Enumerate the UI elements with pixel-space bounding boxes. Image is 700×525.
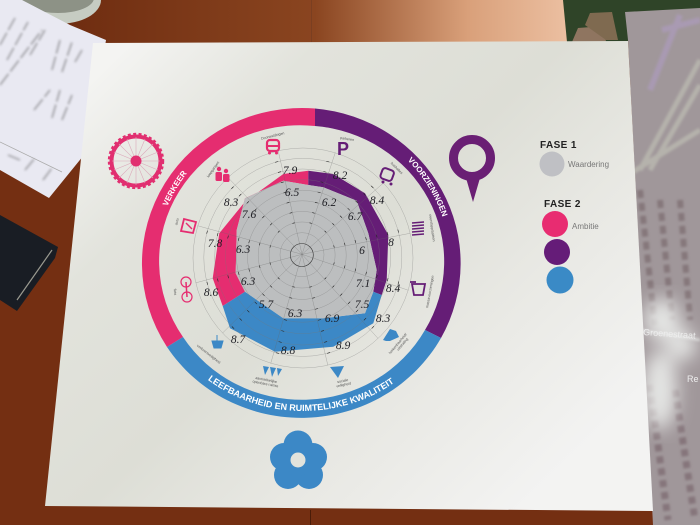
criterion: aantrekkelijke openbare ruimte: openbare ruimte xyxy=(252,379,279,388)
handwritten scores: ambitie: 8.3 xyxy=(376,313,390,325)
poster sheet xyxy=(45,41,653,511)
criterion: fiets: fiets xyxy=(173,288,177,296)
handwritten scores: ambitie: 7.8 xyxy=(208,238,222,250)
outer ring: leefbaarheid en ruimtelijke kwaliteit xyxy=(167,330,441,418)
criterion: overstapplaatsen xyxy=(412,214,436,242)
criterion: verkeersveiligheid xyxy=(196,335,223,365)
ambitie polygon: verkeer xyxy=(213,171,308,306)
legend: fase 2: FASE 2 xyxy=(544,199,581,210)
handwritten scores: waardering: 6.2 xyxy=(322,197,336,209)
criterion: massavoorzieningen xyxy=(410,275,435,308)
aerial map background: Groenestraat xyxy=(643,327,696,341)
outer ring: voorzieningen: VOORZIENINGEN xyxy=(409,156,448,216)
loose document sheet xyxy=(0,0,106,198)
criterion: auto xyxy=(174,218,196,233)
handwritten scores: waardering: 7.5 xyxy=(355,299,369,311)
handwritten scores: waardering: 6.9 xyxy=(325,313,339,325)
handwritten scores: waardering: 6.3 xyxy=(288,308,302,320)
criterion: herkenbaarheid uitstraling: herkenbaarheid/ xyxy=(388,333,408,355)
handwritten scores: ambitie: 8.3 xyxy=(224,197,238,209)
criterion: parkeren xyxy=(337,136,354,159)
ambitie polygon: voorzieningen xyxy=(308,171,388,295)
handwritten scores: waardering: 6.5 xyxy=(285,187,299,199)
handwritten scores: waardering: 7.6 xyxy=(242,209,256,221)
handwritten scores: ambitie: 8.9 xyxy=(336,340,350,352)
criterion: lopen xyxy=(206,161,230,182)
handwritten scores: waardering: 6.3 xyxy=(241,276,255,288)
legend: fase 2: Ambitie xyxy=(572,222,599,231)
criterion: aantrekkelijke openbare ruimte xyxy=(252,366,282,388)
aerial map background: Re xyxy=(687,374,699,384)
legend: fase 2 xyxy=(542,199,599,294)
handwritten scores: ambitie: 8.7 xyxy=(231,334,246,346)
icon: bicycle wheel xyxy=(109,134,163,188)
criterion: auto: auto xyxy=(174,218,180,226)
legend: fase 1 xyxy=(540,140,609,176)
handwritten scores: ambitie: 8.4 xyxy=(386,283,400,295)
criterion: bushaltes xyxy=(380,161,404,186)
aerial map background xyxy=(563,0,700,525)
waardering polygon xyxy=(236,181,377,318)
criterion: massavoorzieningen: massavoorzieningen xyxy=(425,275,435,308)
criterion: overstapplaatsen: overstapplaatsen xyxy=(428,214,436,242)
criterion: sociale veiligheid xyxy=(330,366,351,388)
criterion: doorwaldingen: Doorwaldingen xyxy=(261,131,285,141)
handwritten scores: ambitie: 8.6 xyxy=(204,287,218,299)
outer ring: leefbaarheid en ruimtelijke kwaliteit: LEEFBAARHEID EN RUIMTELIJKE KWALITEIT xyxy=(208,375,393,411)
icon: map pin xyxy=(454,140,490,202)
criterion: bushaltes: bushaltes xyxy=(390,161,404,175)
criterion: sociale veiligheid: sociale xyxy=(337,378,349,384)
handwritten scores: waardering: 5.7 xyxy=(259,299,274,311)
criterion: aantrekkelijke openbare ruimte: aantrekkelijke xyxy=(255,376,277,384)
criterion: lopen: loopgangen xyxy=(206,161,220,178)
outer ring: verkeer xyxy=(142,108,315,347)
handwritten scores: ambitie: 7.9 xyxy=(283,165,297,177)
legend: fase 1: Waardering xyxy=(568,160,609,169)
handwritten scores: waardering: 6.7 xyxy=(348,211,363,223)
criterion: parkeren: P xyxy=(337,139,349,159)
handwritten scores: waardering xyxy=(236,187,370,325)
wallet xyxy=(0,215,58,311)
criterion: fiets xyxy=(173,277,192,302)
criterion: doorwaldingen xyxy=(261,131,285,154)
handwritten scores: waardering: 6 xyxy=(359,245,365,257)
criterion: sociale veiligheid: veiligheid xyxy=(336,381,351,388)
criterion: parkeren: parkeren xyxy=(340,136,354,142)
handwritten scores: ambitie: 8.2 xyxy=(333,170,347,182)
legend: fase 1: FASE 1 xyxy=(540,140,577,151)
handwritten scores: waardering: 6.3 xyxy=(236,244,250,256)
handwritten scores: ambitie: 8 xyxy=(388,237,394,249)
handwritten scores: ambitie xyxy=(204,165,400,357)
outer ring: voorzieningen xyxy=(315,108,461,338)
criterion: herkenbaarheid uitstraling: uitstraling xyxy=(396,337,409,352)
outer ring: verkeer: VERKEER xyxy=(162,170,187,205)
handwritten scores: ambitie: 8.4 xyxy=(370,195,384,207)
radar chart xyxy=(193,148,413,368)
criterion: herkenbaarheid uitstraling xyxy=(383,329,412,358)
ambitie polygon: leefbaarheid xyxy=(223,292,382,352)
handwritten scores: ambitie: 8.8 xyxy=(281,345,295,357)
criterion: verkeersveiligheid: verkeersveiligheid xyxy=(196,344,221,365)
glass on table xyxy=(15,0,101,24)
icon: flower xyxy=(270,430,327,489)
handwritten scores: waardering: 7.1 xyxy=(356,278,370,290)
